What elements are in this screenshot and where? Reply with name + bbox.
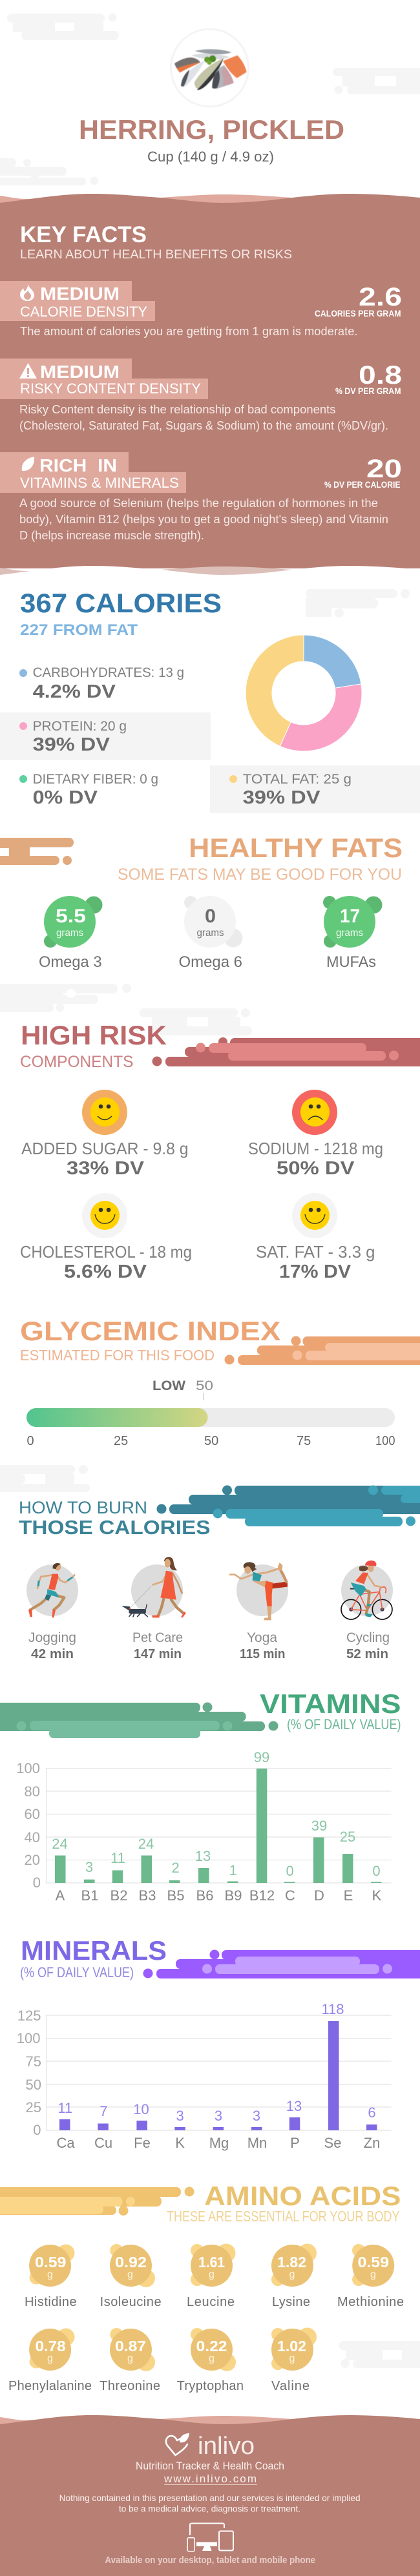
icon: devices [187,2523,233,2551]
chart: vitamins bar chart: 20 [25,1852,40,1868]
heading: those calories: THOSE CALORIES [19,1516,211,1539]
chart: glycemic index gauge: 100 [375,1434,395,1448]
amino: tryptophan: Tryptophan [177,2379,244,2393]
decorative cloud: amino [339,2341,420,2368]
chart: minerals bar chart: 0 [33,2122,41,2138]
fact: rich in vitamins and minerals: RICH IN [39,455,117,475]
chart: minerals bar chart: Fe [134,2135,151,2151]
activity: yoga [230,1562,288,1661]
chart: minerals bar chart: Mg [209,2135,229,2151]
chart: vitamins bar chart: 40 [25,1829,40,1845]
amino: valine [271,2328,317,2393]
chart: vitamins bar chart: 25 [340,1829,355,1845]
icon: warning triangle [19,363,37,379]
icon: woman walking dog [121,1557,186,1617]
chart: minerals bar chart: 3 [176,2108,184,2124]
amino: leucine [187,2244,235,2309]
chart: glycemic index gauge: LOW [152,1378,185,1393]
chart: minerals bar chart: 11 [58,2100,72,2116]
activity: pet care: Pet Care [132,1630,183,1645]
decorative bars: healthy fats [0,838,74,865]
icon: smiley on gray [292,1193,337,1238]
fact: calorie density: CALORIES PER GRAM [315,309,401,318]
chart: vitamins bar chart: 60 [25,1806,40,1822]
chart: minerals bar chart: Cu [94,2135,112,2151]
amino: phenylalanine [8,2328,92,2393]
stat: omega 3: grams [56,928,83,939]
chart: vitamins bar chart: B1 [81,1887,98,1904]
activity: yoga: 115 min [240,1647,286,1661]
chart: minerals bar chart: Mn [247,2135,267,2151]
activity: cycling: Cycling [346,1630,390,1645]
chart: vitamins bar chart: K [372,1887,382,1904]
risk: cholesterol [20,1193,192,1282]
chart: minerals bar chart: P [290,2135,300,2151]
icon: jogger [26,1563,78,1617]
logo: inlivo heart [166,2433,255,2460]
risk: added sugar [21,1090,189,1179]
fact: rich in vitamins and minerals: % DV PER CALORIE [324,480,401,490]
chart: minerals bar chart [17,2001,392,2151]
activity: jogging: Jogging [28,1630,76,1645]
chart: minerals bar chart: Zn [364,2135,380,2151]
amino: threonine [100,2328,160,2393]
amino: lysine: Lysine [272,2295,310,2309]
amino: methionine: g [370,2269,376,2280]
legend: total fat: TOTAL FAT: 25 g [243,772,352,787]
chart: vitamins bar chart: B6 [196,1887,213,1904]
chart: minerals bar chart: 3 [215,2108,222,2124]
chart: vitamins bar chart: 0 [286,1863,294,1879]
heading: high risk: HIGH RISK [21,1020,167,1050]
key facts heading: KEY FACTS [20,222,147,247]
chart: minerals bar chart: 6 [368,2104,376,2121]
activity: cycling [341,1561,393,1661]
fact: rich in vitamins and minerals: body), Vitamin B12 (helps you to get a good night's sleep) and Vitamin [19,513,388,526]
chart: vitamins bar chart: 80 [25,1783,40,1800]
amino: isoleucine: Isoleucine [100,2295,162,2309]
chart: vitamins bar chart: 2 [171,1860,180,1876]
serving size: Cup (140 g / 4.9 oz) [147,149,274,165]
decorative bars: burn calories [156,1486,420,1526]
chart: vitamins bar chart: 1 [229,1862,237,1878]
legend: protein [0,712,211,760]
amino: methionine: 0.59 [358,2254,389,2270]
amino: valine: Valine [271,2379,310,2393]
amino: isoleucine: g [127,2269,133,2280]
activity: pet care: 147 min [134,1647,182,1661]
amino: threonine: Threonine [100,2379,160,2393]
chart: vitamins bar chart: B3 [139,1887,156,1904]
chart: minerals bar chart: 10 [133,2101,149,2117]
activity: cycling: 52 min [346,1647,388,1661]
stat: omega 6: grams [196,928,224,939]
amino: leucine: 1.61 [198,2254,225,2270]
chart: glycemic index gauge: 0 [27,1434,34,1448]
fact: risky content density: % DV PER GRAM [335,386,401,396]
activity: pet care [121,1557,186,1661]
stat: MUFAs: MUFAs [326,953,376,971]
chart: vitamins bar chart: E [344,1887,353,1904]
logo: inlivo heart: inlivo [198,2433,255,2460]
amino: phenylalanine: 0.78 [35,2338,66,2354]
availability note: Available on your desktop, tablet and mobile phone [105,2555,315,2566]
subheading: minerals: (% OF DAILY VALUE) [20,1964,134,1980]
fact: calorie density: MEDIUM [40,284,120,304]
fact: rich in vitamins and minerals: A good source of Selenium (helps the regulation of hormones in the [19,497,378,510]
chart: vitamins bar chart: 13 [195,1848,211,1864]
subheading: glycemic index: ESTIMATED FOR THIS FOOD [20,1347,215,1364]
legend: carbohydrates: CARBOHYDRATES: 13 g [33,665,184,680]
fact: calorie density: 2.6 [359,283,402,311]
decorative bars: vitamins [0,1703,278,1738]
decorative bars: high risk [152,1037,420,1066]
heading: healthy fats: HEALTHY FATS [189,833,403,863]
legend: dietary fiber: 0% DV [33,787,98,808]
chart: vitamins bar chart: 24 [138,1836,154,1852]
subheading: high risk: COMPONENTS [20,1053,133,1071]
chart: vitamins bar chart: A [56,1887,65,1904]
icon: smiley on gray [82,1193,127,1238]
activity: yoga: Yoga [247,1630,277,1645]
chart: vitamins bar chart: 99 [254,1749,269,1765]
heading: minerals: MINERALS [21,1935,167,1966]
chart: vitamins bar chart: 0 [33,1875,41,1891]
chart: vitamins bar chart: B2 [110,1887,127,1904]
chart: minerals bar chart: 50 [26,2077,41,2093]
chart: vitamins bar chart [16,1749,392,1904]
activity: jogging: 42 min [31,1647,74,1661]
legend: dietary fiber: DIETARY FIBER: 0 g [33,772,158,787]
disclaimer: to be a medical advice, diagnosis or treatment. [119,2504,300,2514]
chart: glycemic index gauge: 50 [204,1434,218,1448]
chart: minerals bar chart: 75 [26,2053,41,2070]
chart: glycemic index gauge [26,1378,395,1448]
fact: risky content density: (Cholesterol, Saturated Fat, Sugars & Sodium) to the amount (%DV/gr). [19,419,388,432]
risk: sodium: SODIUM - 1218 mg [248,1139,383,1158]
legend: dietary fiber [19,772,158,808]
icon: cyclist [341,1561,393,1619]
heading: glycemic index: GLYCEMIC INDEX [20,1316,280,1346]
legend: carbohydrates [19,665,184,702]
panel: footer [0,2415,420,2576]
chart: macronutrient donut [246,635,362,751]
decorative bars: amino acids [0,2187,194,2216]
legend: protein: PROTEIN: 20 g [33,719,127,734]
chart: minerals bar chart: Ca [57,2135,75,2151]
chart: minerals bar chart: 118 [321,2001,344,2017]
stat: omega 3: 5.5 [56,906,86,927]
risk: sodium: 50% DV [277,1158,355,1179]
amino: phenylalanine: g [47,2353,53,2364]
icon: food photo of herring in a circle [171,29,248,107]
risk: saturated fat: 17% DV [279,1262,352,1282]
risk: added sugar: ADDED SUGAR - 9.8 g [21,1139,189,1158]
heading: amino acids: AMINO ACIDS [204,2181,401,2211]
key facts subheading: LEARN ABOUT HEALTH BENEFITS OR RISKS [20,248,292,262]
stat: MUFAs [323,896,383,971]
risk: cholesterol: 5.6% DV [64,1262,147,1282]
decorative cloud: burn [0,1465,90,1492]
fact: risky content density: Risky Content density is the relationship of bad components [19,403,336,416]
title: HERRING, PICKLED [79,114,344,145]
amino: lysine: 1.82 [277,2254,306,2270]
legend: protein: 39% DV [33,734,110,755]
disclaimer [59,2493,361,2514]
amino: lysine: g [289,2269,295,2280]
decorative bars: glycemic index [225,1336,420,1365]
decorative clouds: high risk [0,984,252,1035]
amino: histidine [25,2244,77,2309]
risk: added sugar: 33% DV [67,1158,145,1179]
stat: omega 3: Omega 3 [39,953,102,971]
amino: leucine: g [209,2269,215,2280]
amino: tryptophan [177,2328,244,2393]
chart: vitamins bar chart: 3 [85,1859,93,1875]
icon: flame [20,284,34,301]
legend: total fat [210,765,420,813]
fact: calorie density [0,281,402,338]
stat: omega 6: 0 [205,906,216,927]
stat: omega 6: Omega 6 [178,953,242,971]
chart: minerals bar chart: 3 [253,2108,260,2124]
amino: lysine [271,2244,317,2309]
amino: methionine: Methionine [337,2295,404,2309]
subheading: calories from fat: 227 FROM FAT [20,621,138,639]
chart: minerals bar chart: 125 [17,2008,41,2024]
amino: histidine: Histidine [25,2295,77,2309]
legend: carbohydrates: 4.2% DV [33,681,116,702]
chart: vitamins bar chart: B12 [249,1887,275,1904]
amino: tryptophan: 0.22 [196,2338,227,2354]
chart: vitamins bar chart: 100 [16,1760,40,1776]
decorative cloud: calories [306,589,410,618]
heading: calories: 367 CALORIES [20,588,222,618]
fact: risky content density: 0.8 [359,361,402,390]
chart: minerals bar chart: K [175,2135,185,2151]
amino: tryptophan: g [209,2353,215,2364]
fact: rich in vitamins and minerals: VITAMINS & MINERALS [20,475,179,491]
chart: vitamins bar chart: 24 [52,1836,68,1852]
amino: threonine: g [127,2353,133,2364]
icon: smiley on orange [82,1090,127,1135]
chart: vitamins bar chart: 39 [311,1818,327,1834]
activity: jogging [26,1563,78,1661]
amino: leucine: Leucine [187,2295,235,2309]
amino: isoleucine [100,2244,162,2309]
amino: methionine [337,2244,404,2309]
decorative bars: minerals [143,1949,420,1979]
fact: rich in vitamins and minerals [0,452,402,542]
chart: minerals bar chart: Se [324,2135,341,2151]
amino: isoleucine: 0.92 [115,2254,147,2270]
risk: saturated fat [256,1193,375,1282]
subheading: healthy fats: SOME FATS MAY BE GOOD FOR YOU [118,866,402,884]
fact: calorie density: The amount of calories you are getting from 1 gram is moderate. [20,325,358,338]
icon: sad face on red [292,1090,337,1135]
stat: omega 6 [178,896,243,971]
fact: risky content density: RISKY CONTENT DENSITY [20,380,201,397]
amino: valine: 1.02 [277,2338,306,2354]
legend: total fat: 39% DV [243,787,320,808]
icon: leaf [22,457,34,471]
risk: cholesterol: CHOLESTEROL - 18 mg [20,1242,192,1262]
disclaimer: Nothing contained in this presentation and our services is intended or implied [59,2493,361,2503]
risk: sodium [248,1090,383,1179]
icon: yoga pose [230,1562,288,1620]
fact: rich in vitamins and minerals: 20 [366,455,402,483]
fact: calorie density: CALORIE DENSITY [20,304,147,320]
risk: saturated fat: SAT. FAT - 3.3 g [256,1242,375,1262]
stat: MUFAs: grams [336,928,363,939]
fact: risky content density: MEDIUM [40,362,120,382]
heading: how to burn: HOW TO BURN [19,1498,147,1517]
amino: histidine: 0.59 [35,2254,66,2270]
chart: minerals bar chart: 13 [286,2098,302,2114]
chart: vitamins bar chart: C [285,1887,295,1904]
chart: glycemic index gauge: 50 [196,1378,213,1393]
chart: minerals bar chart: 25 [26,2099,41,2115]
stat: MUFAs: 17 [340,906,360,927]
chart: minerals bar chart: 100 [17,2030,40,2046]
chart: vitamins bar chart: B5 [167,1887,184,1904]
decorative clouds: header [0,13,420,185]
chart: glycemic index gauge: 75 [297,1434,311,1448]
tagline: Nutrition Tracker & Health Coach [136,2460,284,2472]
chart: vitamins bar chart: 11 [110,1850,125,1866]
amino: threonine: 0.87 [115,2338,146,2354]
panel: key facts [0,194,420,582]
chart: glycemic index gauge: 25 [114,1434,128,1448]
website link: www.inlivo.com [163,2473,257,2485]
amino: histidine: g [47,2269,53,2280]
fact: rich in vitamins and minerals: D (helps increase muscle strength). [19,529,204,542]
heading: vitamins: VITAMINS [260,1688,401,1719]
chart: vitamins bar chart: B9 [225,1887,242,1904]
fact: risky content density [0,358,402,432]
chart: minerals bar chart: 7 [100,2103,108,2119]
amino: phenylalanine: Phenylalanine [8,2379,92,2393]
chart: vitamins bar chart: D [314,1887,324,1904]
stat: omega 3 [39,896,102,971]
chart: vitamins bar chart: 0 [372,1863,381,1879]
amino: valine: g [289,2353,295,2364]
